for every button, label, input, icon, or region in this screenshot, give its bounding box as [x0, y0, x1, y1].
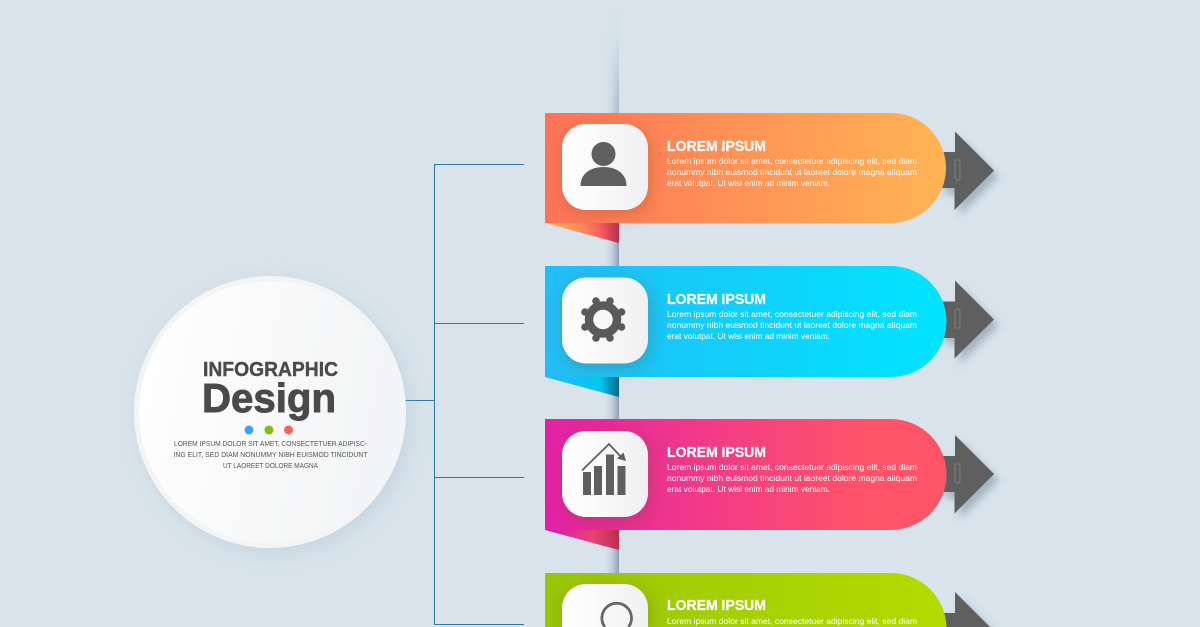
- icon box: magnifier: [562, 584, 648, 627]
- card body 2: [545, 266, 946, 377]
- circle description: LOREM IPSUM DOLOR SIT AMET, CONSECTETUER ADIPISC-: [174, 439, 368, 448]
- arrow 3: [940, 435, 994, 514]
- fold 1: [545, 223, 619, 243]
- title 2: LOREM IPSUM: [667, 292, 766, 308]
- circle description: [174, 439, 368, 470]
- panel: green card: [545, 573, 990, 627]
- heading: design: Design: [202, 375, 336, 421]
- body text 3: [667, 463, 917, 494]
- body text 4: Lorem ipsum dolor sit amet, consectetuer adipiscing elit, sed diam: [667, 617, 917, 626]
- panel: pink card: [545, 419, 994, 550]
- body text 3: Lorem ipsum dolor sit amet, consectetuer adipiscing elit, sed diam: [667, 463, 917, 472]
- title 3: LOREM IPSUM: [667, 445, 766, 461]
- three dots: [244, 426, 293, 434]
- panel: blue card: [545, 266, 994, 397]
- icon box: gear: [562, 278, 648, 364]
- fold 3: [545, 530, 619, 550]
- body text 2: [667, 310, 917, 341]
- vertical background bar: [608, 46, 619, 573]
- body text 2: Lorem ipsum dolor sit amet, consectetuer adipiscing elit, sed diam: [667, 310, 917, 319]
- body text 1: erat volutpat. Ut wisi enim ad minim veniam.: [667, 179, 830, 188]
- card body 1: [545, 113, 946, 223]
- title 1: LOREM IPSUM: [667, 139, 766, 155]
- body text 1: Lorem ipsum dolor sit amet, consectetuer adipiscing elit, sed diam: [667, 157, 917, 166]
- icon box: person: [562, 124, 648, 210]
- arrow 4: [940, 592, 990, 627]
- title 4: LOREM IPSUM: [667, 598, 766, 614]
- heading: infographic: INFOGRAPHIC: [203, 358, 338, 381]
- central circle: [134, 276, 406, 548]
- fold 2: [545, 377, 619, 397]
- card body 3: [545, 419, 946, 530]
- arrow 1: [940, 132, 994, 210]
- body text 3: nonummy nibh euismod tincidunt ut laoreet dolore magna aliquam: [667, 474, 917, 483]
- body text 3: erat volutpat. Ut wisi enim ad minim veniam.: [667, 485, 830, 494]
- circle description: ING ELIT, SED DIAM NONUMMY NIBH EUISMOD TINCIDUNT: [174, 450, 368, 459]
- body text 2: erat volutpat. Ut wisi enim ad minim veniam.: [667, 332, 830, 341]
- arrow 2: [940, 280, 994, 358]
- panel: orange card: [545, 113, 994, 243]
- body text 1: [667, 157, 917, 188]
- card body 4: [545, 573, 946, 627]
- connector lines: [405, 164, 524, 625]
- circle description: UT LAOREET DOLORE MAGNA: [223, 461, 318, 470]
- icon box: chart: [562, 431, 648, 517]
- body text 1: nonummy nibh euismod tincidunt ut laoreet dolore magna aliquam: [667, 168, 917, 177]
- body text 2: nonummy nibh euismod tincidunt ut laoreet dolore magna aliquam: [667, 321, 917, 330]
